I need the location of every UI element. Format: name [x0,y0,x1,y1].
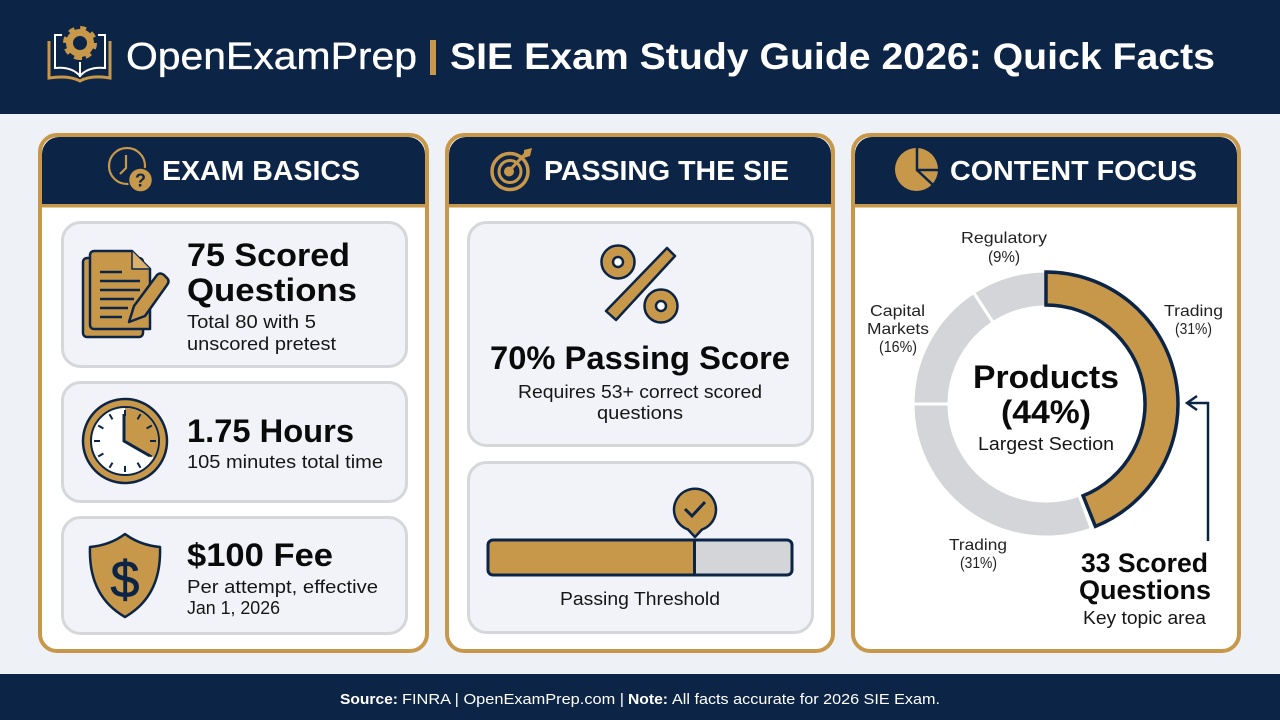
callout: 33 scored questions: 33 Scored [1081,548,1208,578]
title: brand: OpenExamPrep [126,36,417,78]
icon: clock with question mark [109,148,152,192]
label: trading right [1164,303,1223,338]
header banner [0,0,1280,114]
stat: 70% passing score: 70% Passing Score [490,340,790,376]
description: correct answers needed: Requires 53+ correct scored [518,382,762,402]
label: trading right: (31%) [1175,321,1212,338]
icon: dollar shield [90,534,160,617]
icon: clock with question mark: ? [135,170,146,190]
icon: pie chart [895,148,938,191]
donut center label: (44%) [1001,394,1091,430]
panel: exam basics [40,135,427,651]
label: regulatory: (9%) [988,249,1020,266]
label: regulatory [961,230,1047,266]
stat: 75 scored questions: Questions [187,272,357,308]
label: trading bottom: Trading [949,537,1007,554]
callout: 33 scored questions: Questions [1079,575,1211,605]
donut center label [973,359,1119,454]
icon: dollar shield: $ [111,551,140,609]
card: passing score [468,222,812,446]
description: total questions: Total 80 with 5 [187,312,316,332]
stat: $100 fee: $100 Fee [187,537,333,573]
label: trading bottom: (31%) [960,555,997,572]
description: per attempt [187,577,378,618]
stat: 75 scored questions: 75 Scored [187,237,350,273]
panel: passing the sie [447,135,833,651]
icon: book and gear logo [49,28,110,81]
callout: 33 scored questions: Key topic area [1083,608,1207,628]
card: passing threshold [468,462,812,632]
label: trading right: Trading [1164,303,1223,320]
label: capital markets: Markets [867,321,929,338]
label: trading bottom [949,537,1007,572]
heading: passing the sie: PASSING THE SIE [544,155,789,186]
icon: clock [83,399,167,483]
label: regulatory: Regulatory [961,230,1047,247]
card: exam time [62,382,406,502]
chart: threshold progress bar [488,540,792,575]
description: per attempt: Per attempt, effective [187,577,378,597]
donut center label: Largest Section [978,434,1114,454]
label: capital markets [867,303,929,356]
arrow: callout to products segment [1187,396,1208,541]
label: capital markets: Capital [870,303,925,320]
icon: check marker [674,489,716,537]
source and note text: Note: [628,691,668,708]
description: total questions [187,312,336,354]
stat: 75 scored questions [187,237,357,308]
icon: document and pencil [83,251,168,337]
label: capital markets: (16%) [879,339,917,356]
description: correct answers needed [518,382,762,423]
heading: exam basics: EXAM BASICS [162,155,360,186]
title: guide name: SIE Exam Study Guide 2026: Quick Facts [450,36,1215,77]
callout: 33 scored questions [1079,548,1211,628]
description: total questions: unscored pretest [187,334,336,354]
source and note text: Source: [340,691,398,708]
heading: content focus: CONTENT FOCUS [950,155,1197,186]
chart: donut of content areas [913,271,1178,537]
description: correct answers needed: questions [597,403,683,423]
source and note text [340,691,940,708]
title divider [430,40,436,75]
footer bar [0,674,1280,720]
description: minutes: 105 minutes total time [187,452,383,472]
description: per attempt: Jan 1, 2026 [187,598,280,618]
panel: content focus [853,135,1239,651]
card: scored questions [62,222,406,366]
card: fee [62,518,406,634]
stat: 1.75 hours: 1.75 Hours [187,413,354,449]
source and note text: All facts accurate for 2026 SIE Exam. [672,691,940,708]
donut center label: Products [973,359,1119,395]
icon: percent sign [602,246,678,322]
icon: target with arrow [492,148,532,190]
label: passing threshold: Passing Threshold [560,589,720,609]
source and note text: FINRA | OpenExamPrep.com | [402,691,624,708]
